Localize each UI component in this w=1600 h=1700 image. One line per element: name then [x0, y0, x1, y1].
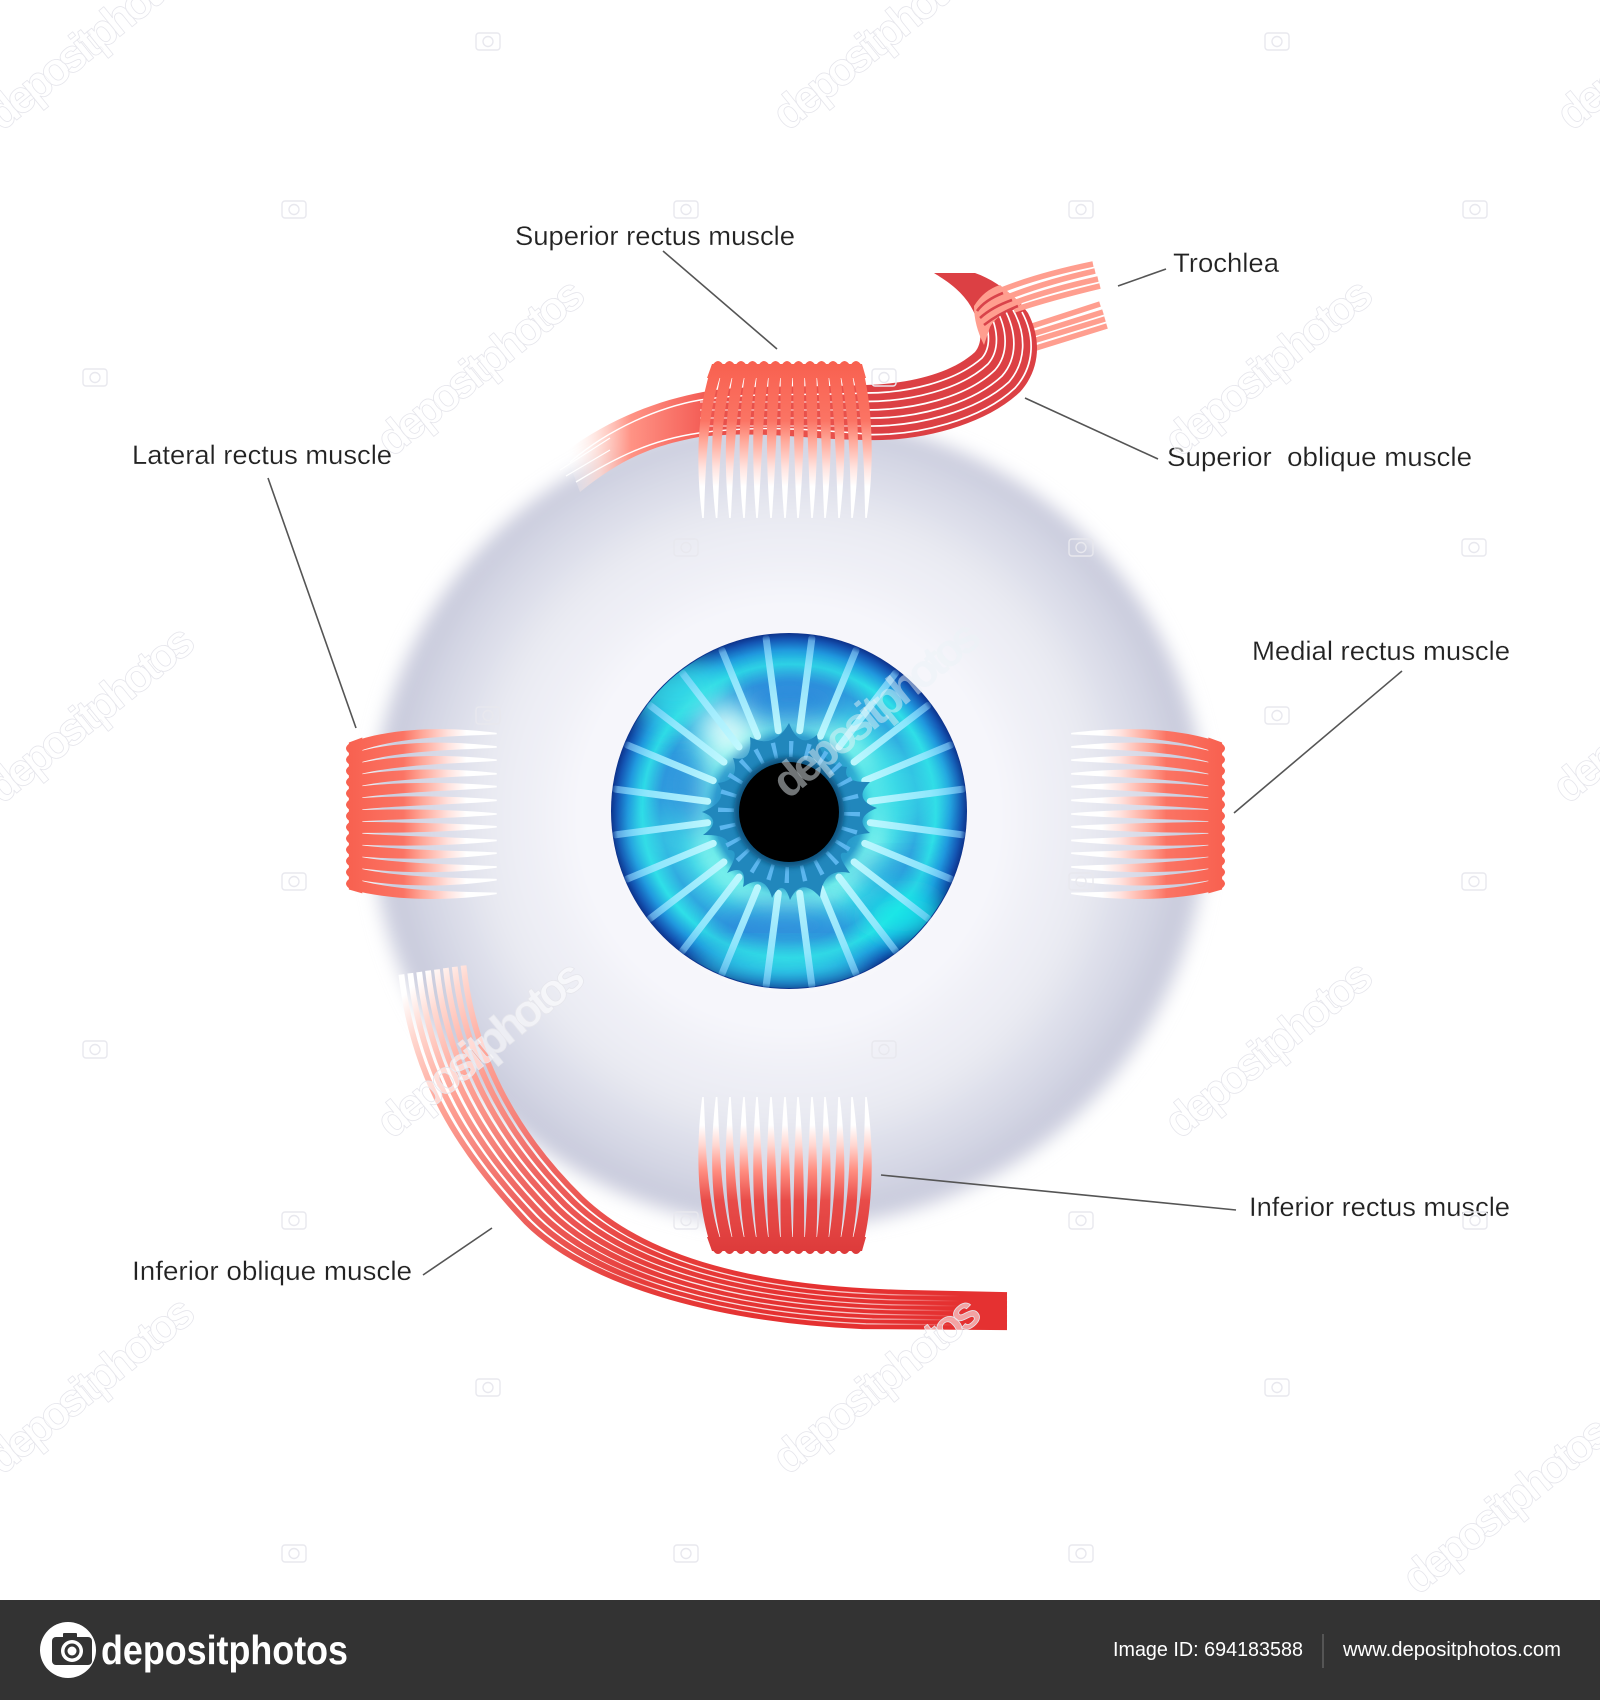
label: superior rectus muscle: Superior rectus muscle [515, 221, 795, 251]
trochlea lower tendon [1020, 304, 1107, 353]
label: lateral rectus muscle: Lateral rectus muscle [132, 440, 392, 470]
trochlea loop [974, 285, 1022, 345]
muscle: lateral rectus [346, 729, 497, 899]
trochlea upper tendon [990, 264, 1100, 310]
footer divider [1322, 1634, 1324, 1668]
watermark marks: depositphotos [762, 1285, 990, 1484]
iris disc [611, 633, 967, 989]
watermark marks: depositphotos [366, 267, 594, 466]
image id: Image ID: 694183588 [1113, 1638, 1303, 1661]
superior oblique belly [866, 273, 1037, 440]
label: superior oblique muscle: Superior oblique muscle [1167, 442, 1472, 472]
muscle: inferior rectus [698, 1097, 872, 1254]
inferior oblique fibre gaps [530, 1200, 960, 1325]
superior oblique tendon tail [565, 385, 866, 492]
footer bar [0, 1600, 1600, 1700]
leader lines [268, 251, 1402, 1275]
label: inferior oblique muscle: Inferior oblique muscle [132, 1256, 412, 1286]
watermark marks: depositphotos [366, 949, 594, 1148]
watermark marks: depositphotos [762, 609, 990, 808]
label: trochlea: Trochlea [1173, 248, 1280, 278]
watermark marks: depositphotos [1154, 949, 1382, 1148]
label: medial rectus muscle: Medial rectus muscle [1252, 636, 1510, 666]
logo wordmark: depositphotos [101, 1627, 348, 1673]
muscle: inferior oblique [401, 966, 1007, 1327]
eyeball sclera [371, 416, 1207, 1228]
iris and pupil [611, 633, 967, 989]
muscle: medial rectus [1071, 729, 1225, 899]
pupil shadow [734, 757, 844, 867]
inferior oblique fibres [401, 966, 1007, 1327]
muscle: superior rectus [698, 361, 872, 518]
iris radial fibres [615, 638, 963, 986]
website url: www.depositphotos.com [1342, 1638, 1561, 1661]
label: inferior rectus muscle: Inferior rectus muscle [1249, 1192, 1510, 1222]
inner star collarette [702, 723, 877, 900]
muscle: superior oblique [560, 264, 1107, 492]
superior oblique fibre gaps [560, 304, 1031, 482]
trochlea loop slits [977, 293, 1018, 325]
watermark marks: depositphotos [1154, 267, 1382, 466]
collarette short fibres [726, 749, 852, 875]
iris colour variation [625, 656, 950, 981]
pupil [739, 762, 839, 862]
icon: camera logo [40, 1622, 96, 1678]
